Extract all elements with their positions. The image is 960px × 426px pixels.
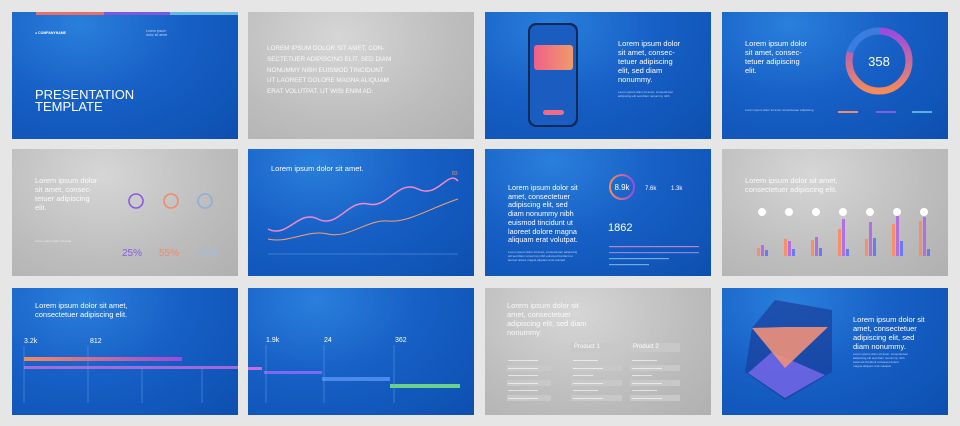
slide 6: line chart: Lorem ipsum dolor sit amet. [271, 164, 364, 173]
slide 6: line chart [248, 149, 474, 276]
slide 7: stats: Lorem ipsum dolor sit [508, 183, 578, 192]
slide 12: radar [722, 288, 948, 415]
slide 12: radar: diam nonummy. [853, 342, 906, 351]
slide 7: stats: 1.3k [671, 186, 683, 192]
slide 4: donut 358: elit. [745, 66, 757, 75]
slide 4: donut 358: sit amet, consec- [745, 48, 802, 57]
slide 7: stats: elit sed diam nonummy nibh euismod tincidunt ut [508, 254, 573, 258]
slide 5: three rings: 25% [122, 248, 142, 259]
slide 7: stats: 1862 [608, 222, 632, 234]
subtitle: dolor sit amet [146, 33, 167, 37]
phone [528, 23, 578, 127]
slide 2: text: NONUMMY NIBH EUISMOD TINCIDUNT [267, 67, 384, 74]
slide 12: radar: Lorem ipsum dolor sit amet, consectetuer [853, 352, 908, 356]
text [618, 39, 680, 84]
slide 9: horizontal bars: Lorem ipsum dolor sit amet, [35, 301, 128, 310]
slide 9: horizontal bars [12, 288, 238, 415]
slide 4: donut 358: Lorem ipsum dolor sit amet consectetuer adipiscing [745, 108, 813, 112]
slide 4: donut 358 [722, 12, 948, 139]
slide 3: phone [485, 12, 711, 139]
slide 3: phone: adipiscing elit sed diam nonummy nibh [618, 94, 670, 98]
slide 2: text: LOREM IPSUM DOLOR SIT AMET, CON- [267, 45, 384, 52]
slide 5: three rings: Lorem ipsum dolor [35, 176, 97, 185]
slide 7: stats: 7.6k [645, 186, 657, 192]
slide 11: table: Lorem ipsum dolor sit [507, 301, 579, 310]
text: tetuer adipiscing [618, 57, 673, 66]
slide 12: radar: Lorem ipsum dolor sit [853, 315, 925, 324]
subtitle [146, 29, 167, 37]
slide 7: stats: laoreet dolore magna [508, 227, 577, 236]
subtitle: Lorem ipsum [146, 29, 166, 33]
slide 3: phone: Lorem ipsum dolor sit amet, consectetuer [618, 90, 673, 94]
slide 7: stats: adipiscing elit, sed [508, 200, 568, 209]
slide 12: radar: adipiscing elit, sed [853, 333, 914, 342]
slide 7: stats: amet, consectetuer [508, 192, 570, 201]
slide 7: stats: aliquam erat volutpat. [508, 235, 578, 244]
text: elit, sed diam [618, 66, 662, 75]
slide 7: stats: euismod tincidunt ut [508, 218, 573, 227]
slide 11: table: adipiscing elit, sed diam [507, 319, 587, 328]
slide 5: three rings: 20% [197, 248, 217, 259]
slide 7: stats: 8.9k [614, 183, 631, 192]
slide 10: timeline bars: 24 [324, 337, 332, 344]
slide 7: stats: diam nonummy nibh [508, 209, 574, 218]
slide 11: table [485, 288, 711, 415]
slide 4: donut 358: Lorem ipsum dolor [745, 39, 807, 48]
slide 7: stats [485, 149, 711, 276]
donut: 358 [868, 54, 890, 69]
slide 12: radar: euismod tincidunt ut laoreet dolore [853, 360, 899, 364]
slide 1: title [12, 12, 238, 139]
slide 7: stats: laoreet dolore magna aliquam erat volutpat [508, 258, 565, 262]
logo: ● COMPANYNAME [35, 31, 66, 35]
slide 11: table: nonummy. [507, 328, 541, 337]
slide 11: table: amet, consectetuer [507, 310, 571, 319]
slide 2: text: UT LAOREET DOLORE MAGNA ALIQUAM [267, 77, 389, 84]
slide 5: three rings: 55% [159, 248, 179, 259]
slide 5: three rings: sit amet, consec- [35, 185, 92, 194]
slide 8: bar chart: consectetuer adipiscing elit. [745, 185, 837, 194]
title [35, 87, 134, 114]
slide 5: three rings: elit. [35, 203, 47, 212]
slide 10: timeline bars [248, 288, 474, 415]
slide 5: three rings [12, 149, 238, 276]
slide 8: bar chart: Lorem ipsum dolor sit amet, [745, 176, 838, 185]
slide 6: line chart: 83 [452, 171, 458, 177]
slide 5: three rings: Lorem ipsum dolor sit amet [35, 239, 71, 243]
slide 9: horizontal bars: 812 [90, 338, 102, 345]
text: nonummy. [618, 75, 652, 84]
text: Lorem ipsum dolor [618, 39, 680, 48]
slide 11: table: Product 1 [574, 344, 600, 350]
slide 12: radar: magna aliquam erat volutpat [853, 364, 891, 368]
title: TEMPLATE [35, 99, 103, 114]
text: sit amet, consec- [618, 48, 675, 57]
title: PRESENTATION [35, 87, 134, 102]
slide 2: text: SECTETUER ADIPISCING ELIT, SED DIAM [267, 56, 391, 63]
donut [838, 28, 932, 113]
slide 4: donut 358: tetuer adipiscing [745, 57, 800, 66]
slide 9: horizontal bars: 3.2k [24, 338, 38, 345]
slide 10: timeline bars: 362 [395, 337, 407, 344]
slide 5: three rings: tetuer adipiscing [35, 194, 90, 203]
slide 11: table: Product 2 [633, 344, 659, 350]
slide 8: bar chart [722, 149, 948, 276]
slide 2: text: ERAT VOLUTPAT. UT WISI ENIM AD. [267, 88, 373, 95]
slide 9: horizontal bars: consectetuer adipiscing elit. [35, 310, 127, 319]
slide 12: radar: adipiscing elit sed diam nonummy nibh [853, 356, 905, 360]
slide 7: stats: Lorem ipsum dolor sit amet, consectetuer adipiscing [508, 250, 577, 254]
slide 12: radar: amet, consectetuer [853, 324, 917, 333]
slide 2: text [248, 12, 474, 139]
slide 10: timeline bars: 1.9k [266, 337, 280, 344]
